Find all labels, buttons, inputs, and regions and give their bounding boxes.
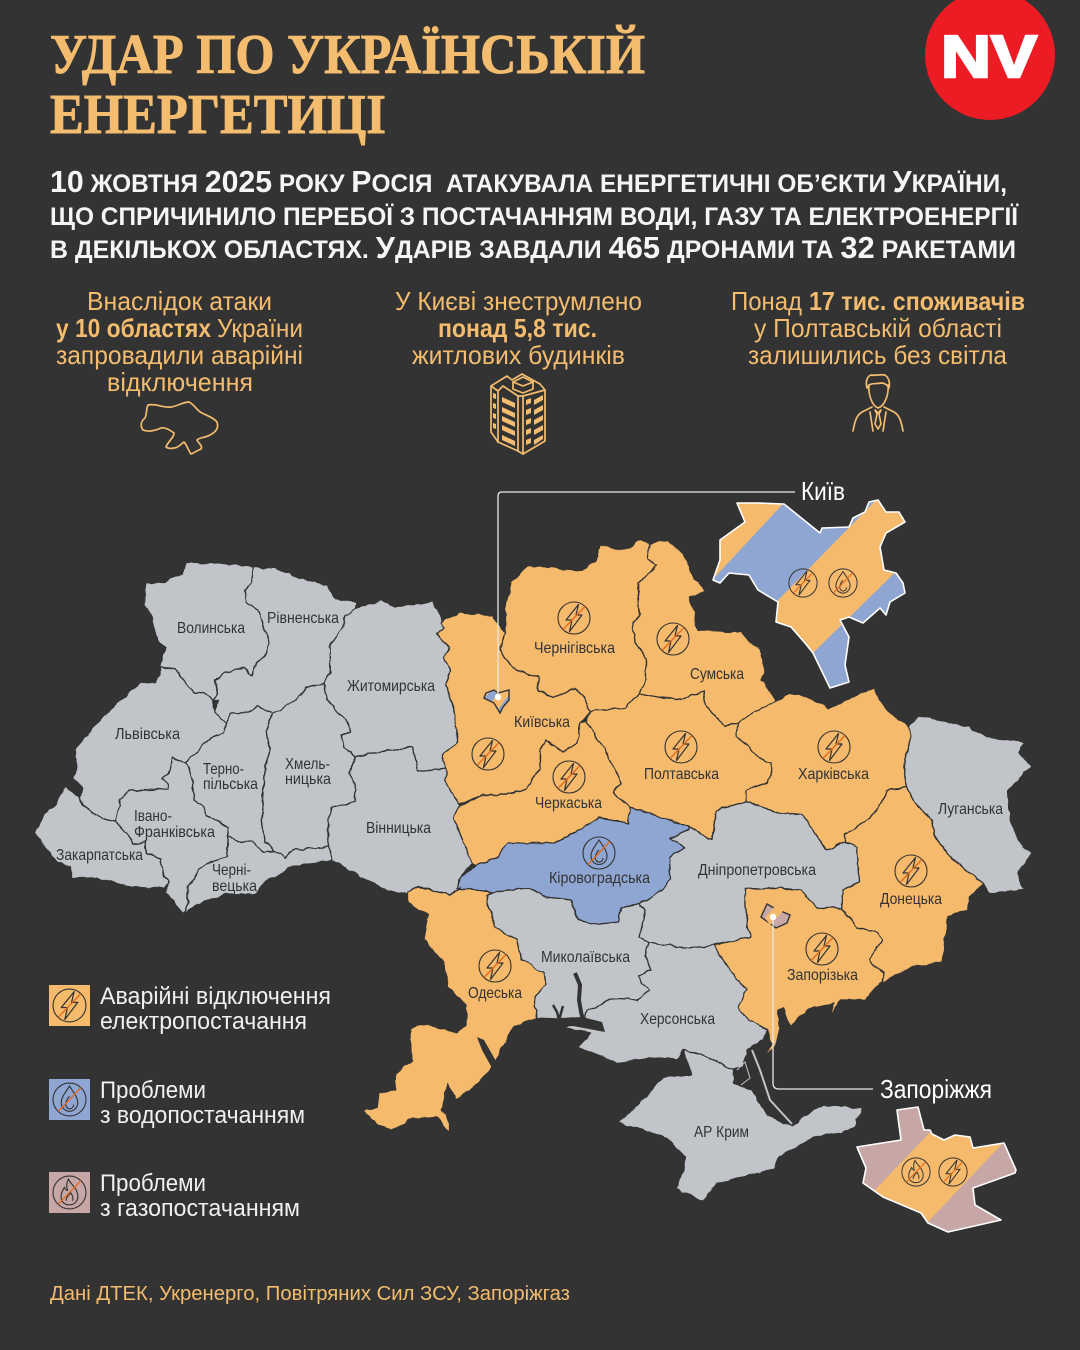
region: АР Крим	[618, 1050, 863, 1202]
region: Волинська	[145, 563, 270, 700]
map labels: Франківська	[134, 824, 215, 841]
map labels: Запорізька	[787, 967, 858, 984]
map labels: Терно-	[203, 761, 244, 778]
title: УДАР ПО УКРАЇНСЬКІЙ	[50, 24, 645, 86]
map labels	[56, 610, 1003, 1141]
legend: water supply problems: з водопостачанням	[100, 1102, 305, 1129]
fact: Kyiv houses without power: житлових будинків	[412, 340, 625, 370]
map of Ukraine	[34, 540, 1033, 1202]
fact: Kyiv houses without power: понад 5,8 тис.	[438, 313, 597, 343]
region: Київська	[437, 613, 590, 807]
map labels: Київська	[514, 714, 570, 731]
logo: NV	[925, 0, 1055, 120]
legend: gas supply problems: з газопостачанням	[100, 1195, 300, 1222]
legend: gas supply problems	[49, 1170, 300, 1222]
fact: regions with emergency outages	[56, 286, 303, 397]
inset map: Київ	[712, 499, 906, 689]
city: Запоріжжя on map	[761, 904, 790, 928]
callout: Київ: Київ	[801, 476, 845, 506]
title: ЕНЕРГЕТИЦІ	[50, 84, 386, 146]
map labels: пільська	[203, 776, 258, 793]
fact: Poltava consumers without power: залишились без світла	[748, 340, 1007, 370]
callout: Запоріжжя: Запоріжжя	[880, 1074, 992, 1104]
city: Київ on map	[484, 688, 511, 714]
logo: NV: NV	[941, 24, 1037, 90]
legend: water supply problems: Проблеми	[100, 1077, 206, 1104]
title	[50, 24, 645, 146]
region: Рівненська	[213, 567, 356, 723]
region: Миколаївська	[486, 888, 651, 1020]
fact: Poltava consumers without power: у Полтавській області	[754, 313, 1002, 343]
map labels: Рівненська	[267, 610, 339, 627]
fact: Poltava consumers without power: 17 тис. споживачів	[809, 286, 1025, 316]
fact: Poltava consumers without power: Понад	[731, 286, 802, 316]
icon: Ukraine outline	[141, 402, 218, 454]
fact: regions with emergency outages: у 10 областях	[56, 313, 211, 343]
map labels: АР Крим	[694, 1124, 749, 1141]
icon: person in suit	[853, 375, 903, 431]
region: Хмельницька	[262, 683, 356, 858]
fact: Kyiv houses without power: У Києві знеструмлено	[395, 286, 642, 316]
map labels: Львівська	[115, 726, 180, 743]
map labels: Дніпропетровська	[698, 862, 816, 879]
region: Івано-Франківська	[115, 758, 229, 913]
region: Черкаська	[453, 722, 629, 865]
map labels: Чернігівська	[534, 640, 615, 657]
region: Луганська	[903, 715, 1033, 893]
map labels: Івано-	[134, 808, 172, 825]
legend: water supply problems	[49, 1077, 305, 1129]
legend: gas supply problems: Проблеми	[100, 1170, 206, 1197]
region: Житомирська	[324, 600, 458, 772]
legend: emergency outages	[49, 983, 331, 1035]
map labels: ницька	[285, 771, 331, 788]
region: Полтавська	[586, 692, 772, 840]
icon: apartment building	[491, 374, 545, 454]
region: Кіровоградська	[457, 807, 689, 925]
map labels: Хмель-	[285, 756, 330, 773]
map labels: Вінницька	[366, 820, 431, 837]
region: Запорізька	[714, 888, 883, 1057]
map labels: Закарпатська	[56, 847, 143, 864]
callout: Запоріжжя	[770, 914, 992, 1104]
region: Херсонська	[565, 942, 767, 1070]
fact: regions with emergency outages: Внаслідок атаки	[87, 286, 272, 316]
region: Чернігівська	[500, 540, 656, 712]
region: Одеська	[363, 887, 546, 1133]
subtitle text block: ЩО СПРИЧИНИЛО ПЕРЕБОЇ З ПОСТАЧАННЯМ ВОДИ, ГАЗУ ТА ЕЛЕКТРОЕНЕРГІЇ	[50, 203, 1019, 231]
region: Львівська	[74, 666, 226, 822]
region: Дніпропетровська	[640, 802, 859, 948]
inset map: Запоріжжя	[850, 1107, 1020, 1232]
map labels: Миколаївська	[541, 949, 630, 966]
map labels: Сумська	[690, 666, 744, 683]
map icons: power outages and water problems	[472, 602, 927, 982]
legend: emergency outages: електропостачання	[100, 1008, 307, 1035]
callout: Київ	[495, 476, 845, 700]
fact: regions with emergency outages: України	[217, 313, 303, 343]
water features: Dnister, Bug, Dnipro estuaries and Syvash	[477, 973, 792, 1124]
region: Донецька	[841, 788, 984, 983]
subtitle text block	[50, 164, 1019, 265]
map labels: Донецька	[880, 891, 942, 908]
source note: Дані ДТЕК, Укренерго, Повітряних Сил ЗСУ, Запоріжгаз	[50, 1282, 570, 1305]
region: Вінницька	[329, 747, 472, 895]
map labels: Житомирська	[347, 678, 435, 695]
map labels: Одеська	[468, 985, 522, 1002]
region: Закарпатська	[34, 786, 168, 888]
map labels: Херсонська	[640, 1011, 715, 1028]
map labels: Черкаська	[535, 795, 602, 812]
map labels: Чернi-	[212, 862, 251, 879]
fact: Kyiv houses without power	[395, 286, 642, 370]
region: Тернопільська	[187, 705, 275, 853]
fact: regions with emergency outages: запровадили аварійні	[56, 340, 303, 370]
subtitle text block: 10 ЖОВТНЯ 2025 РОКУ РОСІЯ АТАКУВАЛА ЕНЕРГЕТИЧНІ ОБ’ЄКТИ УКРАЇНИ,	[50, 164, 1007, 199]
map labels: Полтавська	[644, 766, 719, 783]
map labels: Луганська	[938, 801, 1003, 818]
legend: emergency outages: Аварійні відключення	[100, 983, 331, 1010]
fact: Poltava consumers without power	[731, 286, 1025, 370]
map labels: вецька	[212, 878, 257, 895]
region: Чернівецька	[184, 837, 332, 913]
subtitle text block: В ДЕКІЛЬКОХ ОБЛАСТЯХ. УДАРІВ ЗАВДАЛИ 465 ДРОНАМИ ТА 32 РАКЕТАМИ	[50, 230, 1016, 265]
region: Харківська	[737, 688, 911, 850]
fact: regions with emergency outages: відключення	[107, 367, 253, 397]
map labels: Волинська	[177, 620, 245, 637]
map labels: Кіровоградська	[549, 870, 650, 887]
region: Сумська	[633, 540, 776, 727]
map labels: Харківська	[798, 766, 869, 783]
